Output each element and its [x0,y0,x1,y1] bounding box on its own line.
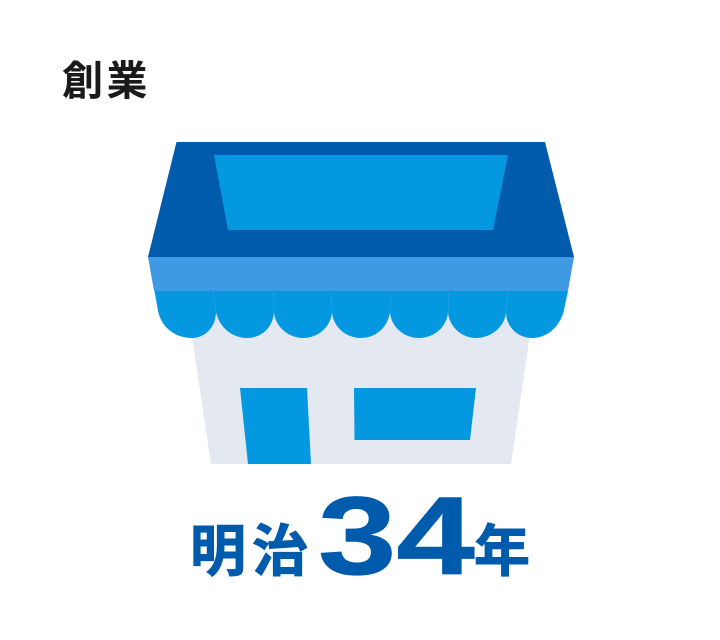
icon: shop building [148,142,574,464]
window [354,388,476,440]
year suffix: 年: 年 [474,520,530,583]
founding year: 明治34年 [190,473,530,598]
heading: 創業: 創業 [62,58,151,104]
year number: 34: 34 [318,473,475,598]
door [240,388,311,464]
awning band [148,257,574,291]
roof panel [214,155,508,230]
roof [148,142,574,257]
awning scallops [154,291,568,338]
building wall [186,300,535,464]
era name: 明治: 明治 [190,520,314,583]
